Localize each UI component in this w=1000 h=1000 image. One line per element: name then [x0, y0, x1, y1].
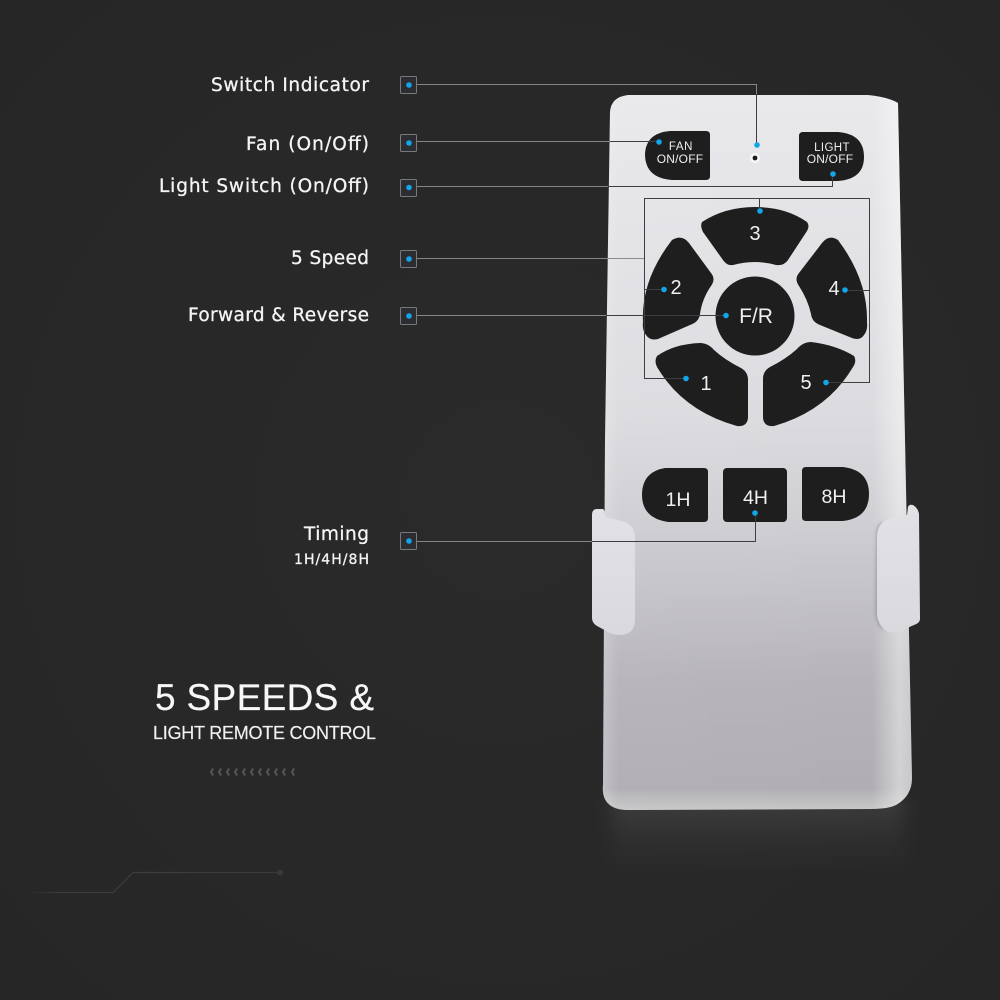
line: switch indicator	[756, 94, 758, 145]
button: fan on/off: ON/OFF	[657, 152, 703, 166]
callout: timing	[294, 524, 416, 568]
callout lines off remote	[416, 84, 756, 542]
button: timer 4H: 4H	[743, 487, 768, 509]
callout: timing: Timing	[303, 524, 369, 545]
button: speed 4: 4	[828, 278, 840, 300]
title	[153, 677, 376, 743]
button: speed 3	[701, 207, 808, 265]
left belt clip	[592, 509, 635, 635]
line: fan	[610, 140, 659, 142]
decorative circuit line	[28, 870, 283, 892]
button: timer 1H: 1H	[666, 489, 690, 511]
button: fan on/off: FAN	[669, 141, 693, 153]
remote edge highlight	[603, 95, 912, 810]
remote reflection	[612, 800, 904, 876]
indicator LED	[750, 153, 760, 163]
callout: switch indicator: Switch Indicator	[211, 75, 369, 96]
button: light on/off: ON/OFF	[807, 152, 853, 166]
button: speed 1: 1	[700, 373, 712, 395]
chevron row	[211, 768, 294, 776]
button: light on/off	[799, 132, 864, 181]
callout: five speed	[291, 248, 416, 269]
button: timer 8H	[802, 467, 869, 521]
button: speed 2: 2	[670, 277, 682, 299]
button: timer 8H: 8H	[822, 486, 846, 508]
button: speed 3: 3	[749, 223, 761, 245]
title: LIGHT REMOTE CONTROL	[153, 723, 376, 743]
button: timer 1H	[642, 468, 708, 522]
button: speed 4	[796, 238, 867, 339]
right clip shadow	[876, 522, 884, 630]
line: light switch	[608, 174, 832, 186]
callout: five speed: 5 Speed	[291, 248, 369, 269]
right belt clip	[877, 505, 920, 632]
button: speed 1	[656, 343, 748, 426]
button: speed 5	[763, 342, 855, 426]
callout: light switch: Light Switch (On/Off)	[159, 176, 369, 197]
remote control	[592, 95, 920, 810]
button: light on/off: LIGHT	[814, 142, 850, 154]
button: speed 5: 5	[800, 372, 812, 394]
line: five speed link	[607, 258, 644, 260]
callout: forward and reverse: Forward & Reverse	[188, 305, 369, 326]
button: forward and reverse	[716, 276, 794, 356]
button: fan on/off	[645, 131, 710, 180]
line: timing	[592, 513, 756, 542]
title: 5 SPEEDS &	[155, 677, 374, 718]
five speed bracket	[644, 198, 870, 382]
callout lines on remote	[592, 94, 870, 542]
callout: timing: 1H/4H/8H	[294, 552, 369, 568]
callout: fan: Fan (On/Off)	[246, 134, 369, 155]
remote body	[603, 95, 912, 810]
line: forward and reverse	[606, 314, 726, 316]
target dots	[656, 139, 848, 516]
button: speed 2	[643, 238, 714, 340]
button: forward and reverse: F/R	[739, 305, 773, 328]
button: timer 4H	[723, 468, 787, 522]
